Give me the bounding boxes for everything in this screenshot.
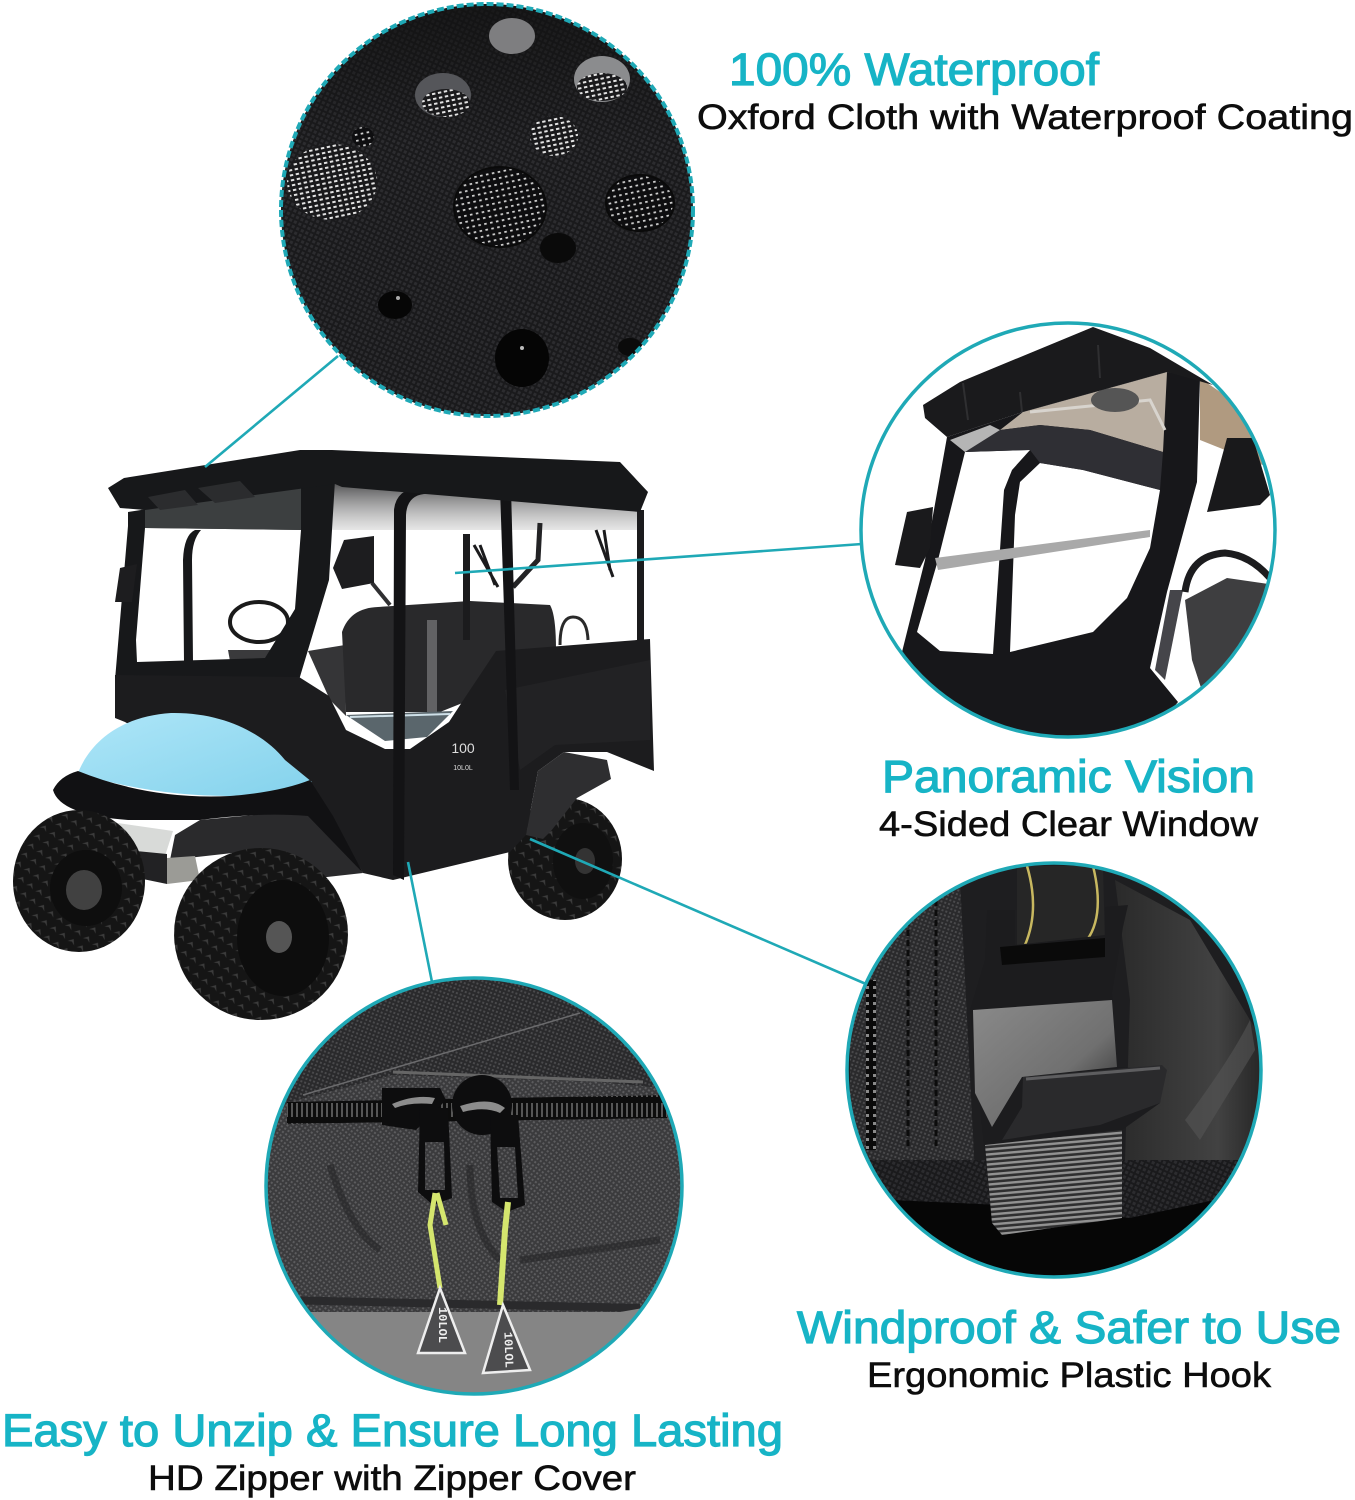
logo: 10L0L [453, 765, 473, 772]
ribbed tab [985, 1130, 1122, 1235]
connector: zipper [408, 862, 432, 982]
left cord [430, 1193, 446, 1288]
door frames [393, 487, 491, 880]
grey plate [973, 1000, 1117, 1127]
heading: 100% Waterproof: 100% Waterproof [729, 44, 1100, 95]
droplet [287, 144, 377, 220]
roof [108, 450, 648, 512]
underbody [170, 810, 363, 880]
golf cart with enclosure [13, 450, 654, 1020]
rear wheel [508, 798, 622, 920]
right cord [500, 1202, 508, 1305]
hem band [870, 1160, 1238, 1218]
text: Ergonomic: Ergonomic Plastic Hook [867, 1356, 1272, 1395]
droplet [415, 73, 471, 117]
circle: zipper [266, 978, 690, 1400]
hook upper plate [986, 905, 1160, 1212]
lower body [115, 639, 654, 880]
droplet [618, 338, 642, 356]
floor highlight [346, 711, 453, 741]
fender [526, 752, 611, 839]
strap [1017, 866, 1105, 950]
left tag: 10LOL [435, 1307, 449, 1343]
droplet [574, 56, 630, 102]
tan background right [1200, 381, 1263, 466]
droplet [495, 329, 549, 387]
silver axle [167, 856, 200, 884]
text: Oxford Cloth: Oxford Cloth with Waterproof Coating [697, 98, 1353, 137]
dark upper glass band [955, 425, 1163, 490]
interior floor panel [308, 645, 346, 716]
water droplets [287, 18, 674, 387]
glass reflections [950, 425, 1000, 452]
bumper [53, 771, 363, 873]
right mirror [1207, 438, 1270, 512]
tan upper glass [1000, 372, 1167, 452]
right slider and pull [452, 1075, 525, 1212]
droplet [352, 127, 374, 147]
text: HD Zipper: HD Zipper with Zipper Cover [148, 1459, 636, 1498]
concrete floor [266, 1300, 690, 1400]
hook lip [1002, 1065, 1167, 1140]
droplet [454, 167, 546, 247]
left mirror [895, 507, 933, 568]
rear seats [342, 601, 556, 712]
connector: waterproof [205, 356, 338, 467]
circle: plastic hook [847, 863, 1262, 1290]
bottom black [896, 1200, 1212, 1276]
logo [451, 740, 475, 772]
right tag [483, 1305, 530, 1373]
light housing [85, 846, 167, 884]
droplet [606, 175, 674, 231]
upper flap [285, 980, 655, 1104]
black frame [900, 372, 1200, 760]
heading: Panoramic Vision: Panoramic Vision [882, 751, 1255, 802]
connector lines [205, 356, 866, 984]
droplet [530, 116, 578, 156]
logo: 100 [451, 740, 475, 756]
woven section [270, 1118, 680, 1165]
text: 4-Sided: 4-Sided Clear Window [879, 805, 1259, 844]
interior band under roof [140, 478, 640, 530]
left slider and pull [382, 1088, 452, 1205]
circle: panoramic window [861, 323, 1275, 760]
rear post [637, 510, 644, 642]
blue hood [78, 713, 312, 796]
connector: window [455, 544, 862, 573]
droplet [540, 233, 576, 263]
heading: Windproof: Windproof & Safer to Use [797, 1302, 1341, 1353]
inner windshield post [183, 530, 201, 662]
zipper teeth [287, 1095, 667, 1124]
steering wheel [228, 602, 290, 672]
circle: waterproof fabric [280, 0, 694, 416]
left side mirror [115, 564, 137, 602]
zipper teeth [866, 980, 876, 1150]
fold shadows [330, 1165, 660, 1260]
steering column and wheel [1155, 550, 1269, 686]
strap rear bar [513, 523, 540, 587]
headlight [83, 818, 173, 856]
left woven panel [850, 880, 975, 1175]
cab frame and windshield [115, 480, 335, 680]
front right wheel [174, 848, 348, 1020]
right side mirror [333, 536, 374, 589]
right tag: 10LOL [500, 1332, 516, 1368]
roll bar [560, 617, 588, 645]
right leather panel [1115, 880, 1262, 1160]
connector: hook [530, 839, 866, 984]
roof visor [923, 327, 1213, 437]
heading: Easy to Unzip: Easy to Unzip & Ensure Long Lasting [2, 1405, 783, 1456]
seat belt bar [372, 583, 390, 605]
strap slot [1000, 938, 1105, 965]
silver bar [935, 530, 1150, 570]
droplet [489, 18, 535, 54]
front left wheel [13, 810, 145, 952]
droplet [378, 291, 412, 319]
seat shape through glass [1091, 388, 1139, 412]
left tag [418, 1288, 465, 1353]
